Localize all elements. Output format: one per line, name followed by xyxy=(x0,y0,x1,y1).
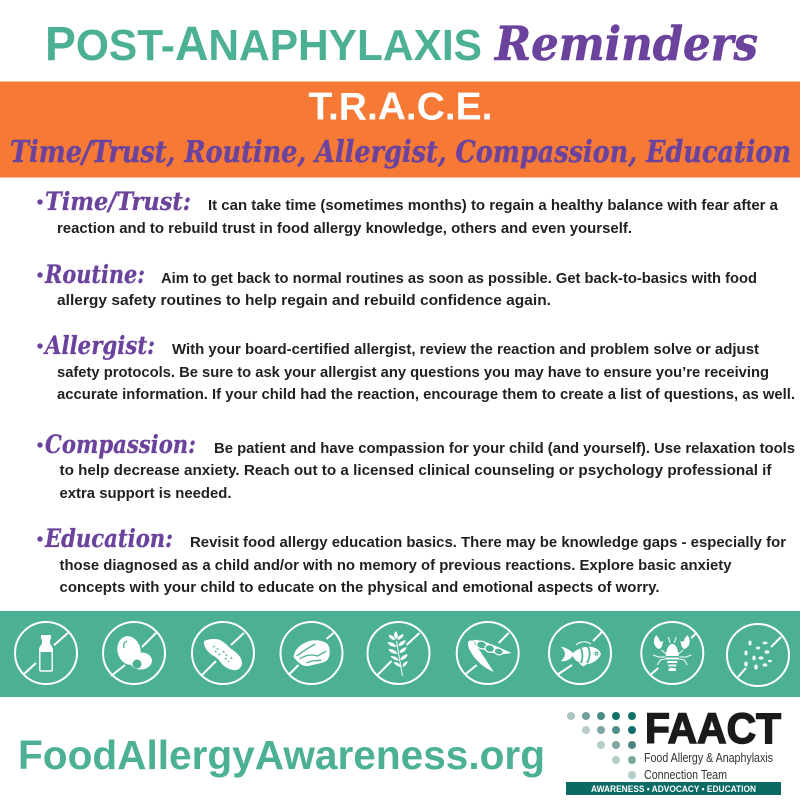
text block: Allergist xyxy=(37,331,795,403)
text block: Time/Trust: It can take time (sometimes months) to regain a healthy balance with fear after a xyxy=(208,197,779,214)
text block: Education: Revisit food allergy education basics. There may be knowledge gaps - especially for xyxy=(190,534,786,551)
panel: orange T.R.A.C.E. banner xyxy=(0,82,800,178)
text block: Time/Trust: Time/Trust: xyxy=(45,187,191,216)
icon: no wheat xyxy=(368,622,430,684)
logo dots xyxy=(567,712,636,779)
text block: Allergist: With your board-certified allergist, review the reaction and problem solve or adjust xyxy=(172,341,759,358)
text block: Compassion: Compassion: xyxy=(45,430,196,459)
logo tagline bar: AWARENESS • ADVOCACY • EDUCATION xyxy=(591,784,756,794)
text block: Time/Trust xyxy=(37,187,779,237)
icon: no fish xyxy=(549,622,611,684)
text block: Allergist: safety protocols. Be sure to ask your allergist any questions you may have to ensure you’re receiving xyxy=(57,364,769,381)
text block: Allergist: Allergist: xyxy=(43,331,155,360)
logo tagline bar xyxy=(566,782,781,795)
text block: Routine xyxy=(37,260,757,309)
logo wordmark: FAACT xyxy=(645,705,781,753)
heading: T.R.A.C.E.: T.R.A.C.E. xyxy=(308,86,492,128)
text block: Compassion: extra support is needed. xyxy=(60,485,232,502)
title xyxy=(45,17,758,72)
panel: green allergen icon band xyxy=(0,611,800,697)
text block: Time/Trust: reaction and to rebuild trust in food allergy knowledge, others and even yourself. xyxy=(57,220,632,237)
logo name: Connection Team xyxy=(644,767,727,782)
text block: Routine: Aim to get back to normal routines as soon as possible. Get back-to-basics with food xyxy=(161,270,757,287)
text block: Education: Education: xyxy=(44,524,173,553)
text block: Education: those diagnosed as a child and/or with no memory of previous reactions. Explore basic anxiety xyxy=(60,557,732,574)
text block: Education xyxy=(37,524,786,596)
icon: no peanut xyxy=(192,622,254,684)
icon: no soy xyxy=(457,622,519,684)
text block: Compassion: to help decrease anxiety. Reach out to a licensed clinical counseling or psychology professional if xyxy=(60,462,773,479)
text block: Compassion xyxy=(37,430,795,502)
icon: no sesame xyxy=(727,624,789,686)
icon: no tree nut xyxy=(280,622,342,684)
logo name: Food Allergy & Anaphylaxis xyxy=(644,750,773,765)
icon: no egg xyxy=(103,622,165,684)
title: POST-ANAPHYLAXIS xyxy=(45,18,482,71)
website URL: FoodAllergyAwareness.org xyxy=(18,732,545,778)
icon: no shellfish xyxy=(641,622,703,684)
logo name xyxy=(644,750,773,782)
icon: no milk xyxy=(15,622,77,684)
text block: Education: concepts with your child to educate on the physical and emotional aspects of worry. xyxy=(60,579,660,596)
text block: Allergist: accurate information. If your child had the reaction, encourage them to create a list of questions, as well. xyxy=(57,386,795,403)
logo: FAACT xyxy=(566,705,781,795)
text block: Compassion: Be patient and have compassion for your child (and yourself). Use relaxation tools xyxy=(214,440,795,457)
text block: Routine: allergy safety routines to help regain and rebuild confidence again. xyxy=(57,292,551,309)
title: Reminders xyxy=(493,17,758,72)
text block: Routine: Routine: xyxy=(44,260,145,289)
